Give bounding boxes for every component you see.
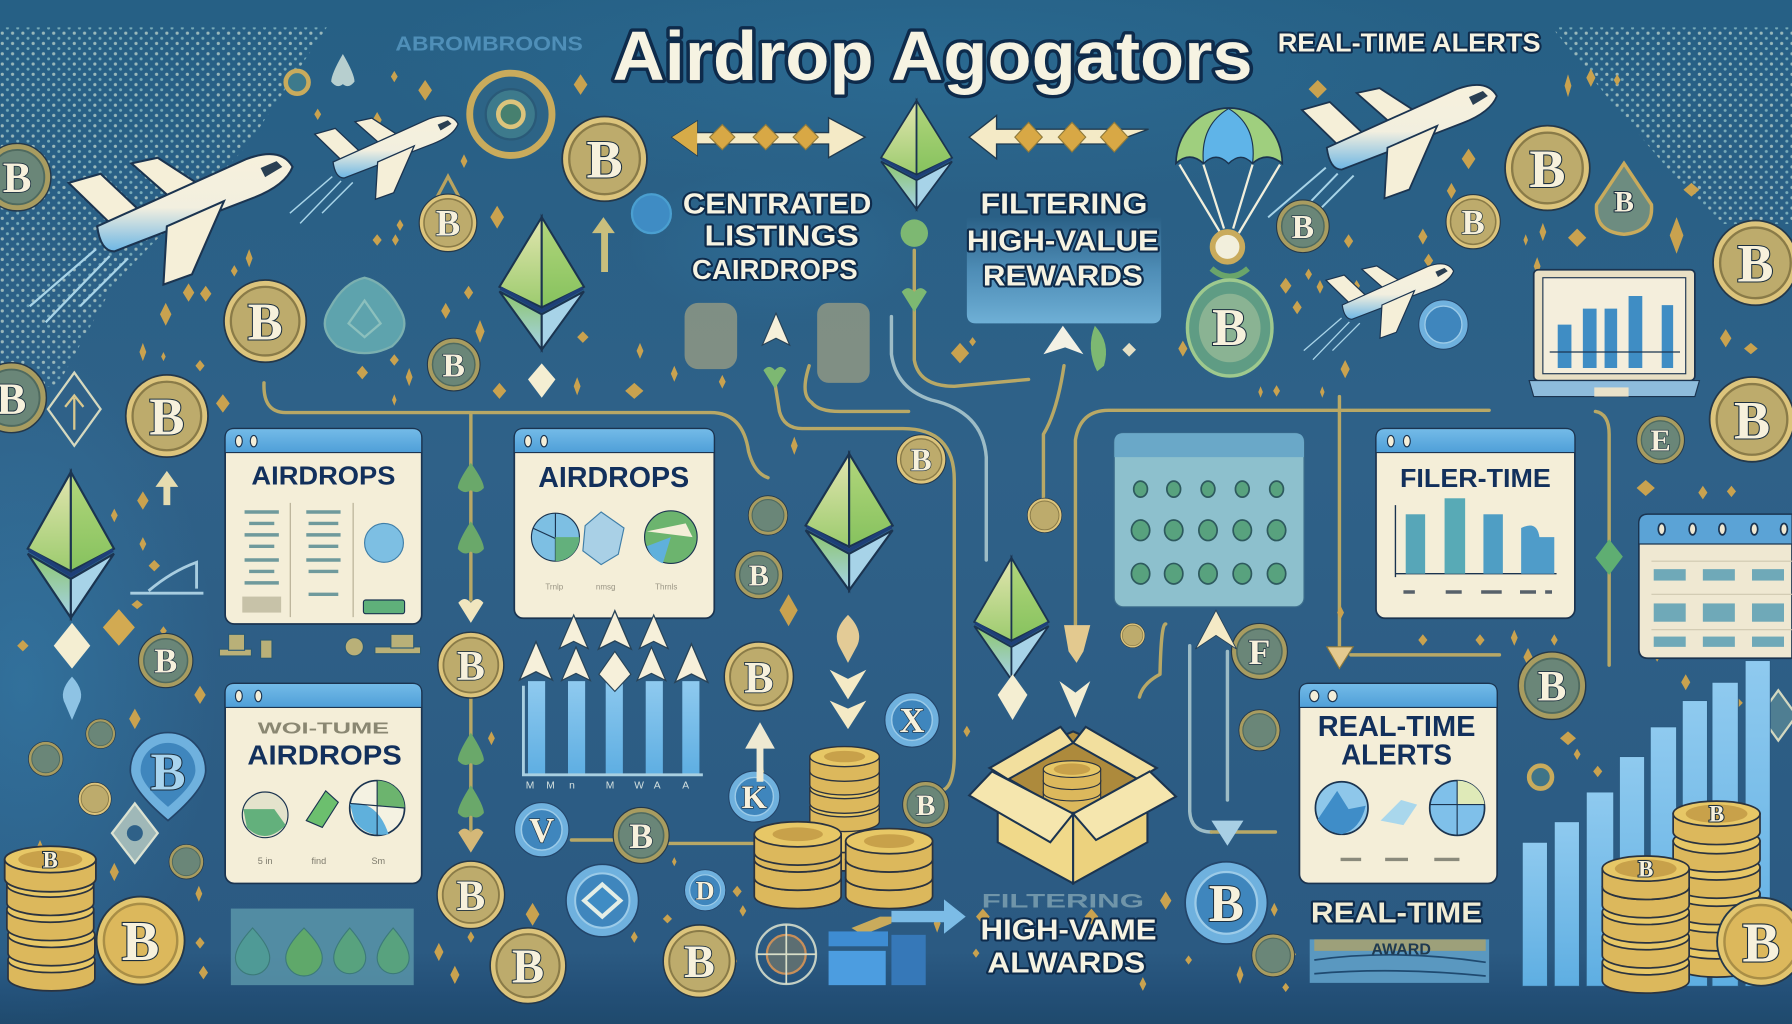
icon: coin [562,116,647,201]
icon: ethereum center [806,454,893,590]
icon: coin: B [1737,234,1773,294]
text: alwards: ALWARDS [987,948,1145,980]
icon: coin front right [1717,898,1792,986]
text: filtering high-value rewards: REWARDS [983,261,1143,293]
arrow: up to K [745,722,775,782]
text: centrated listings [683,189,871,285]
icon: coin: E [1650,424,1671,458]
icon: blue shield coin: B [150,744,186,802]
chart: center bars: n [569,781,575,792]
icon: ethereum far left [28,472,114,618]
icon: X coin: X [899,701,925,740]
icon: coin: B [749,558,769,592]
text: real-time alerts heading: REAL-TIME ALERTS [1278,27,1541,57]
icon: coin: B [512,941,544,994]
panel: window real-time airdrops: find [311,856,326,866]
icon: coin [1710,377,1792,462]
icon: coin: B [684,937,715,988]
icon: blue coin: D [696,876,715,905]
panel: window real-time airdrops [225,683,422,883]
icon: dim coin [903,782,949,828]
panel: window filer-time [1376,429,1575,618]
panel: window grid right [1639,514,1792,658]
panel: awards plate: AWARD [1371,941,1431,958]
icon: ring small [286,71,309,94]
text: centrated listings: LISTINGS [705,221,859,253]
icon: coin: B [1529,139,1565,199]
chart: center bars: A [654,781,661,792]
icon: dim coin: B [916,790,936,822]
icon: coin front right: B [1742,912,1780,974]
icon: plane small right [1304,264,1454,360]
icon: dim coin [1518,652,1586,719]
icon: pendant coin: B [436,203,460,244]
icon: large blue coin: B [1209,875,1244,933]
arrow: up to filtering plate [1043,326,1136,371]
icon: small clutter row [219,634,421,658]
icon: coin F: F [1249,632,1270,672]
connector lines [264,250,1609,843]
arrow: up and down double [1195,610,1243,846]
text: faded filtering: FILTERING [982,890,1144,912]
icon: coin: B [744,653,774,702]
icon: coin dim: B [154,642,177,681]
icon: diamond outline [48,373,101,446]
text: filtering high-value rewards: HIGH-VALUE [967,225,1159,257]
icon: blue ring coin: V [529,811,554,850]
icon: pale spade top [331,54,355,86]
panel: window airdrops pies: nmsg [596,583,615,592]
icon: coin [1637,416,1684,464]
icon: diamond emblem [112,803,158,863]
icon: large blue coin [1185,862,1267,944]
icon: coin: B [457,644,485,690]
icon: drop coin [1596,163,1652,234]
text: real-time: REAL-TIME [1311,897,1482,929]
icon: money bag [1187,269,1272,376]
icon: coin [724,642,793,711]
icon: coin [490,928,566,1004]
icon: coin: B [248,293,283,351]
icon: left coin stack [5,846,96,991]
text: high-vame: HIGH-VAME [981,914,1157,946]
chart: center bars: M [606,781,614,792]
icon: ring [1529,766,1552,789]
icon: coin [224,280,306,362]
text: centrated listings: CENTRATED [683,189,871,221]
text: airdrops: AIRDROPS [247,740,402,771]
icon: coin [663,925,736,997]
icon: faded blobs [685,303,870,383]
text: faded label: WOI-TUME [258,721,390,738]
icon: coin: B [1734,390,1770,450]
icon: coin: B [1292,209,1314,246]
arrow group: rising arrows [520,611,708,691]
panel: window real-time airdrops: Sm [371,856,385,866]
text: airdrops: AIRDROPS [251,461,395,491]
icon: coin small [86,719,115,749]
icon: plane small left [290,116,458,223]
icon: ring coin [1239,710,1280,751]
chart: center bars [523,674,703,792]
text: faded subtitle: ABROMBROONS [395,32,583,55]
icon: spiked wheel [757,925,816,984]
icon: chain nodes left [458,313,790,853]
panel: awards plate [1310,939,1489,983]
icon: dim coin [613,807,669,863]
icon: pendant coin [419,176,477,252]
icon: plane large left [30,154,293,322]
icon: dim coin: B [629,816,653,856]
icon: diamond right [1760,690,1792,741]
chart: rising bars right [1522,661,1770,986]
chart: center bars: A [682,781,689,792]
title: Airdrop Agogators [613,17,1253,95]
icon: coin: B [587,130,623,190]
icon: ring small [1120,623,1145,648]
icon: ring coin [1027,498,1062,533]
panel: teal icon grid [1114,433,1304,607]
icon: blue coin right [1419,300,1468,349]
panel: window real-time airdrops: 5 in [258,856,273,866]
icon: coin small [427,338,480,391]
icon: coin: B [456,873,485,920]
panel: filtering plate [967,217,1161,323]
icon: drop coin: B [1614,186,1634,218]
icon: center coin stacks [754,747,933,909]
icon: right coin stacks: B [1638,857,1653,882]
icon: coin top left [0,143,51,211]
icon: plane large right [1268,85,1497,231]
icon: open box [969,727,1176,883]
icon: ring [1252,934,1295,977]
icon: blue coin [685,870,726,911]
text: centrated listings: CAIRDROPS [692,254,858,285]
icon: right coin stacks: B [1709,802,1724,827]
icon: stand clutter [130,562,203,593]
panel: teal drops strip [231,909,414,985]
icon: cream down arrows [830,615,866,729]
icon: coin F [1231,623,1287,679]
icon: ethereum left [499,217,584,350]
panel: window airdrops pies: Thrnls [655,583,677,592]
text: filer-time: FILER-TIME [1400,463,1551,493]
icon: coin: B [1462,203,1485,242]
text: filtering high-value rewards [967,189,1159,293]
panel: window airdrops pies: Trnlp [545,583,564,592]
icon: coin [748,496,788,535]
icon: small spade arrow [155,471,178,505]
icon: ethereum lower [974,558,1049,680]
icon: gold diamond [103,609,135,646]
icon: coin [438,632,504,698]
text: real-time: REAL-TIME [1318,711,1475,743]
arrow: gold down center [1064,625,1090,663]
icon: coin front left [97,897,185,985]
icon: money bag: B [1212,299,1247,357]
icon: coin front left: B [122,911,159,973]
icon: coin: B [911,442,932,477]
icon: right coin stacks [1602,801,1760,993]
icon: blue diamond coin [566,864,638,937]
icon: cream diamonds [54,363,1090,720]
halftone top right [1552,27,1792,224]
panel: window real-time alerts [1299,683,1497,883]
chart: center bars: M [546,781,555,792]
icon: small coin [169,844,204,879]
icon: coin [1277,200,1329,253]
icon: coin left edge [0,363,46,433]
icon: blue arrow with blocks [829,899,966,985]
icon: blue drop [63,677,81,720]
icon: K coin: K [742,780,768,816]
icon: coin [437,861,505,929]
icon: coin small [78,782,111,815]
panel: window airdrops list [225,429,422,624]
icon: coin small [28,742,63,776]
icon: teal blob [325,278,404,353]
icon: coin [1713,220,1792,305]
icon: green chain node [901,219,928,312]
text: filtering high-value rewards: FILTERING [981,189,1147,221]
icon: coin: B [149,388,184,446]
icon: coin small: B [442,347,465,384]
icon: coin [735,551,783,599]
icon: coin [1446,195,1500,249]
icon: coin top left: B [3,155,32,202]
icon: green diamond [1595,539,1623,575]
icon: coin dim [139,633,193,688]
icon: blue shield coin [130,733,206,821]
arrow: right top chain [969,115,1149,159]
icon: left coin stack: B [43,847,58,872]
halftone top left [0,27,327,391]
text: alerts: ALERTS [1341,740,1452,772]
icon: dim coin: B [1538,664,1566,711]
icon: gold ring [470,73,552,155]
arrow: gold down right [1327,647,1353,669]
chart: center bars: W [634,781,644,792]
icon: X coin [885,693,939,747]
text: airdrops: AIRDROPS [538,462,689,494]
icon: coin [896,435,946,484]
icon: K coin [729,771,780,822]
icon: blue ring coin [515,803,569,857]
panel: window airdrops pies [514,429,714,618]
icon: coin [126,375,208,457]
arrow: left top chain [672,118,865,158]
icon: blue emblem [632,194,671,233]
icon: small arrow up gold near eth [592,217,615,272]
icon: parachute [1176,108,1282,262]
chart: center bars: M [526,781,534,792]
icon: ethereum top [881,101,952,209]
icon: coin [1505,126,1590,210]
icon: laptop chart [1529,270,1699,397]
